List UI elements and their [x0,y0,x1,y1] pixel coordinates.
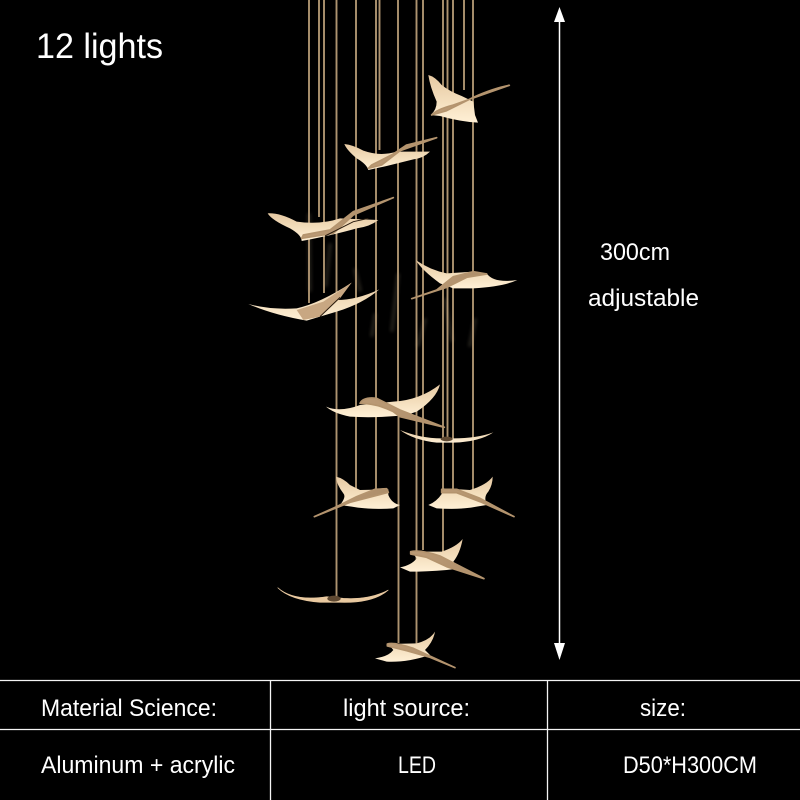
lamp 6 [326,384,444,427]
lamp 3 [268,198,393,241]
upper lamp cluster [248,75,517,321]
lamp 7 [400,430,493,443]
lamp 4 [412,260,517,299]
lamp 2 [344,138,437,170]
light source value: LED [398,752,436,779]
height label: 300cm [600,239,670,266]
lamp 5 [248,283,379,321]
lamp 8 [314,477,400,517]
title: 12 lights [36,27,163,66]
material value: Aluminum + acrylic [41,752,235,779]
material header: Material Science: [41,695,217,722]
lamp 10 [400,539,484,579]
light source header: light source: [343,695,470,722]
spec table [0,680,800,800]
watermark [309,215,475,345]
lamp 12 [375,632,455,668]
lamp 11 [278,588,388,602]
lamp 9 [428,477,514,517]
height arrow [554,7,565,660]
lamp 1 [428,75,509,123]
size value: D50*H300CM [623,752,757,779]
adjustable label: adjustable [588,285,699,312]
hanging wires [309,0,473,645]
size header: size: [640,695,686,722]
lower lamp cluster [278,384,514,668]
